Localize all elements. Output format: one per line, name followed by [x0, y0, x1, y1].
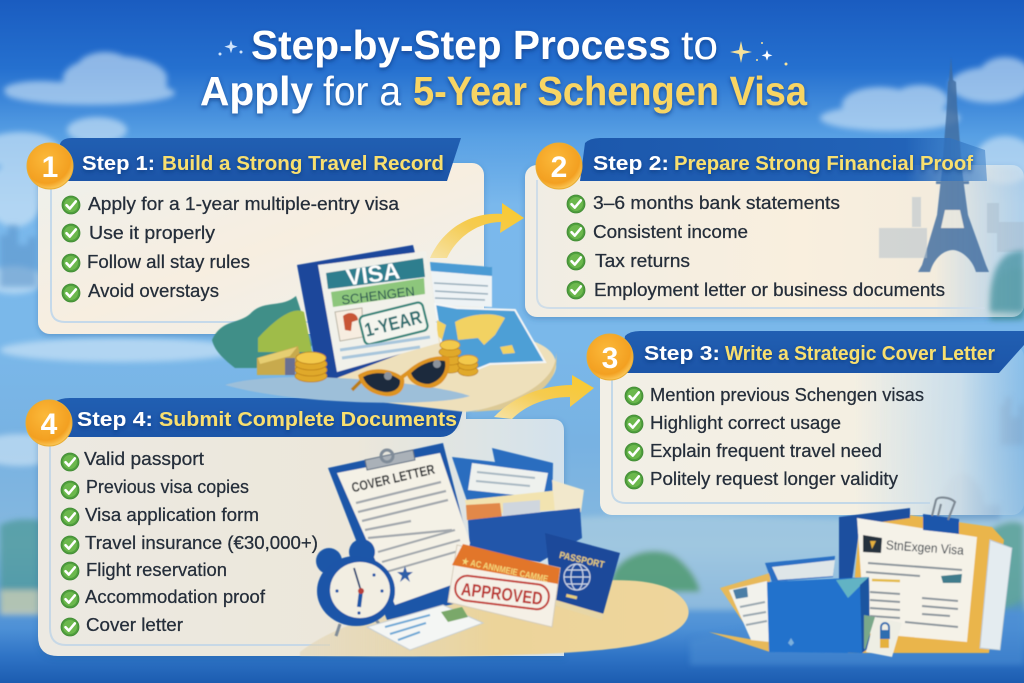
left tan folder: [709, 573, 770, 652]
binder clip: [923, 498, 959, 534]
illustration: application folder scene: [709, 498, 1012, 657]
coin stack left: [295, 352, 327, 382]
approved card: APPROVED: [460, 579, 544, 609]
panel 2 checklist: [567, 193, 945, 300]
blue binder: [839, 508, 910, 585]
panel 2 number badge: [536, 143, 582, 189]
panel 1 checklist: Use it properly: [89, 223, 215, 243]
panel 2 number badge: 2: [551, 151, 567, 184]
panel 3 number badge: 3: [602, 342, 618, 375]
illustration: visa passport scene: [212, 245, 557, 412]
hill highlight: [258, 310, 312, 352]
panel 1 number badge: [27, 143, 73, 189]
title: Step-by-Step Process: [251, 22, 671, 68]
title: [200, 22, 808, 114]
illustration: documents scene: [316, 443, 620, 650]
panel 1 heading text: Build a Strong Travel Record: [162, 153, 444, 175]
panel 3 card: [600, 345, 1024, 515]
green trees: [212, 296, 312, 368]
panel 2 checklist: Consistent income: [593, 222, 748, 242]
small folder paper: [772, 560, 835, 580]
gold suitcase: [257, 346, 302, 375]
panel 1 checklist: [62, 194, 400, 302]
panel 3 heading banner: [620, 331, 1024, 373]
title: Apply: [200, 68, 313, 114]
sunglasses: [352, 356, 450, 396]
title: 5-Year Schengen Visa: [413, 68, 808, 114]
panel 4 heading text: Submit Complete Documents: [159, 409, 457, 431]
panel 2 checklist: Tax returns: [595, 251, 690, 271]
sparkles right of title: [730, 41, 788, 66]
coin stack right: [439, 340, 478, 376]
panel 1 number badge: 1: [42, 151, 58, 184]
panel 3: Write a Strategic Cover Letter: [587, 331, 1024, 515]
blue folder front: [767, 577, 870, 653]
sparkles left of title: [218, 40, 242, 56]
panel 4 number badge: 4: [41, 408, 58, 441]
title: for a: [323, 68, 401, 114]
panel 4 heading text: Step 4:: [77, 409, 153, 431]
panel 4 card: [38, 410, 564, 656]
panel 4 checklist: Valid passport: [84, 449, 204, 469]
Eiffel tower illustration: [879, 57, 1024, 272]
panel 3 heading text: Write a Strategic Cover Letter: [725, 343, 995, 365]
pedestal island: [225, 331, 557, 412]
panel 4: Submit Complete Documents: [26, 398, 689, 657]
panel 4 heading banner: [55, 398, 466, 437]
arrow: step 1 to step 2: [430, 203, 524, 258]
panel 2 trees: [990, 250, 1024, 312]
panel 3 checklist: Mention previous Schengen visas: [650, 385, 924, 405]
visa page: SCHENGEN: [341, 284, 416, 307]
panel 3 checklist: Explain frequent travel need: [650, 441, 882, 461]
main application document: StnExgen Visa: [885, 537, 965, 558]
passport: [545, 533, 620, 620]
panel 3 number badge: [587, 334, 633, 380]
panel 4 checklist: Cover letter: [86, 615, 183, 635]
panel 1: Build a Strong Travel Record: [27, 138, 484, 334]
background right city and land: [540, 268, 1024, 610]
sand beach lower center: [300, 580, 689, 657]
panel 4 checklist: Previous visa copies: [86, 477, 249, 497]
panel 2: Prepare Strong Financial Proof: [525, 57, 1024, 317]
side documents right: [980, 540, 1012, 650]
panel 3 checklist: [625, 385, 924, 489]
sea band right lower: [690, 600, 1024, 665]
panel 2 card: [525, 165, 1024, 317]
visa page: 1-YEAR: [363, 307, 424, 342]
panel 2 checklist: Employment letter or business documents: [594, 280, 945, 300]
alarm clock: [316, 539, 395, 636]
panel 1 heading banner: [60, 138, 461, 181]
clipboard: [328, 443, 482, 620]
panel 3 heading text: Step 3:: [644, 343, 720, 365]
visa page: VISA: [344, 257, 401, 291]
main application document: [857, 518, 977, 642]
passport book cover: [297, 245, 437, 378]
map document behind: [430, 262, 492, 307]
left document: [729, 581, 770, 642]
panel 1 checklist: Apply for a 1-year multiple-entry visa: [88, 194, 400, 214]
background land left: [0, 225, 100, 615]
panel 2 checklist: 3–6 months bank statements: [593, 193, 840, 213]
clipboard clip: [365, 450, 415, 470]
approved card: ★ AC ANNMEIE CAMME: [461, 556, 549, 584]
panel 1 card: [38, 163, 484, 334]
panel 4 checklist: Flight reservation: [86, 560, 227, 580]
cover letter paper: [337, 453, 470, 605]
arrow: step 3 to step 4 link: [494, 375, 594, 419]
panel 4 checklist: Accommodation proof: [85, 587, 266, 607]
gold folder back: [848, 515, 1004, 653]
title: to: [681, 22, 718, 68]
small blue folder: [765, 556, 835, 582]
panel 4 number badge: [26, 400, 72, 446]
panel 4 checklist: Visa application form: [85, 505, 259, 525]
lock card: [864, 615, 902, 657]
panel 4 checklist: Travel insurance (€30,000+): [85, 533, 318, 553]
panel 1 checklist: Avoid overstays: [88, 281, 219, 301]
panel 2 heading text: Step 2:: [593, 153, 669, 175]
approved card: [448, 544, 560, 627]
blue folder back: [452, 448, 553, 510]
background clouds: [0, 52, 1024, 466]
panel 3 checklist: Highlight correct usage: [650, 413, 841, 433]
panel 3 checklist: Politely request longer validity: [650, 469, 898, 489]
blue folder front: [468, 508, 582, 562]
panel 1 checklist: Follow all stay rules: [87, 252, 250, 272]
panel 1 heading text: Step 1:: [82, 153, 155, 175]
cover letter paper: COVER LETTER: [350, 462, 436, 495]
panel 4 checklist: [61, 449, 318, 636]
passport: PASSPORT: [558, 550, 605, 571]
ticket card: [367, 605, 483, 650]
folder paper stack: [465, 463, 584, 520]
world map: [435, 304, 545, 370]
panel 2 heading banner: [580, 138, 987, 181]
panel 2 heading text: Prepare Strong Financial Proof: [674, 153, 973, 175]
visa page: [318, 251, 439, 372]
